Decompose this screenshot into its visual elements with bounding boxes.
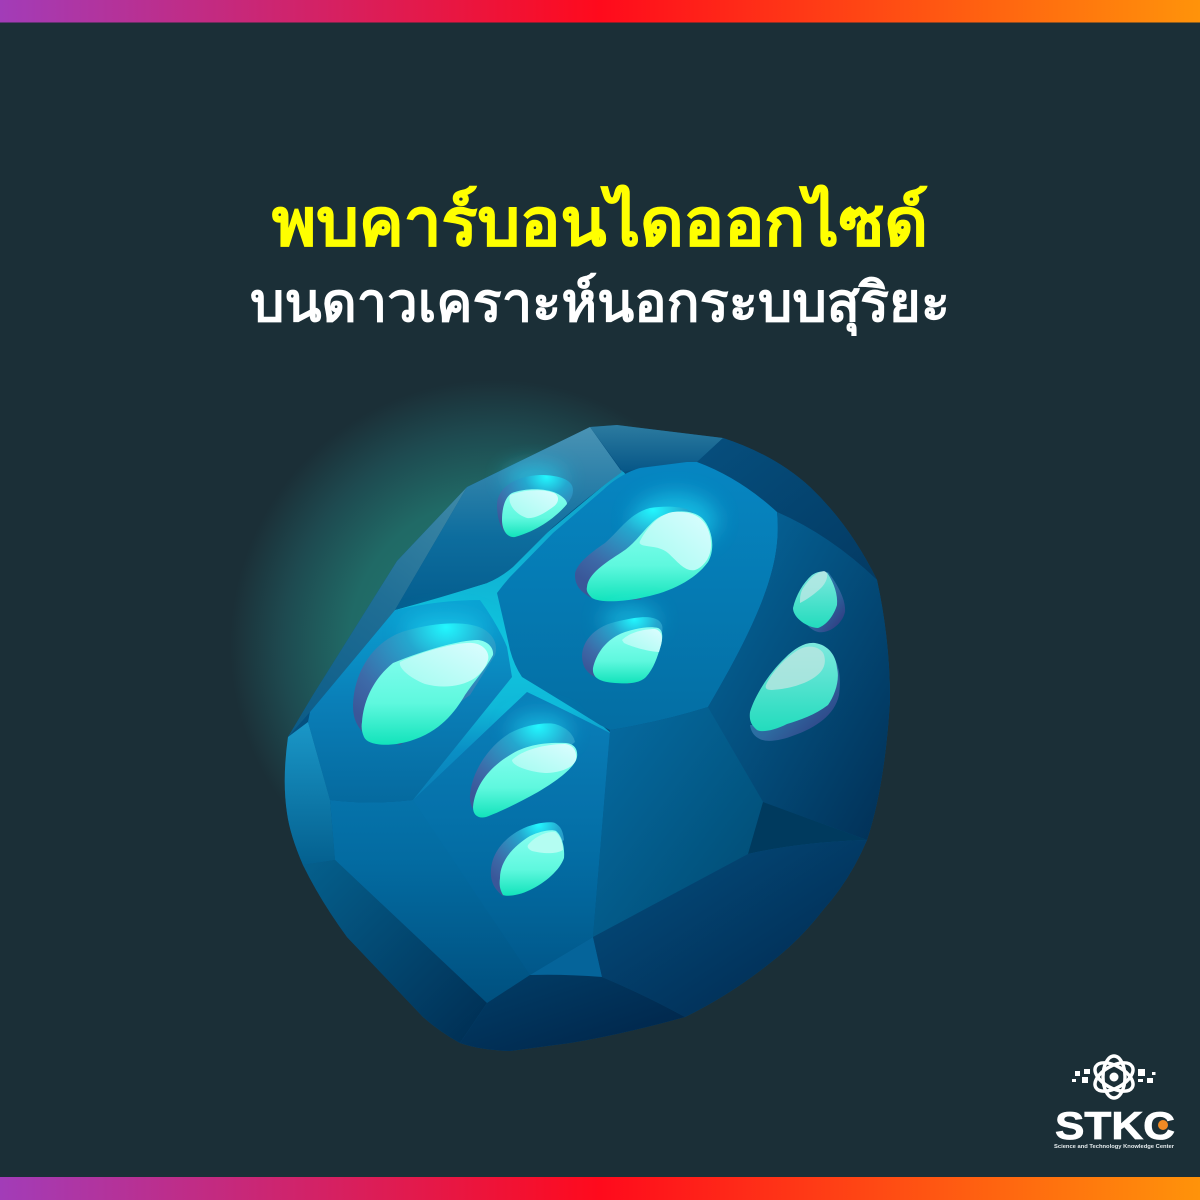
rock illustration [285, 425, 890, 1051]
crater glow [505, 465, 565, 491]
facet: right [708, 512, 890, 840]
rock base silhouette [285, 425, 890, 1051]
highlight [766, 647, 825, 690]
crater glow [510, 715, 570, 745]
crater: left large [353, 615, 496, 745]
crater cup [582, 617, 662, 684]
crater cup [491, 822, 564, 896]
highlight [640, 512, 711, 570]
crystal [500, 830, 564, 896]
bottom gradient bar [0, 1177, 1200, 1200]
crater: top-left [497, 465, 573, 537]
crystal [473, 743, 577, 818]
top gradient bar [0, 0, 1200, 22]
crater: right large [750, 643, 840, 741]
glow behind rock [230, 380, 760, 910]
title: yellow heading: พบคาร์บอนไดออกไซด์ [272, 184, 928, 259]
facet: left bright [308, 600, 512, 802]
subtitle: white heading: บนดาวเคราะห์นอกระบบสุริยะ [250, 272, 950, 337]
logo pixels left [1072, 1069, 1090, 1083]
facet: bottom-right [593, 840, 867, 1017]
logo orange dot [1158, 1120, 1168, 1130]
crater glow [602, 606, 658, 634]
crystal [587, 511, 712, 601]
facet: upper-left edge strip [288, 487, 467, 737]
facet: dark triangle [748, 802, 867, 854]
logo wordmark: STKC [1055, 1105, 1175, 1148]
crystal [793, 571, 837, 628]
highlight [512, 744, 576, 773]
highlight [509, 490, 558, 518]
crystal [593, 627, 662, 683]
crack lines [395, 470, 632, 802]
facet: lower center [593, 707, 763, 937]
crater cup [353, 623, 496, 745]
crater: right upper [793, 571, 845, 632]
crater glow [403, 615, 487, 645]
highlight [800, 571, 827, 603]
facet: lower middle right shade [413, 692, 610, 975]
crater cup [750, 655, 840, 741]
crystal [362, 640, 493, 745]
facet: lower small [530, 937, 602, 977]
crater: lower small [491, 822, 564, 896]
facet: bottom-left strip [303, 860, 487, 1043]
crater cup [575, 507, 695, 600]
crater cup [497, 475, 573, 537]
logo icon: atom [1090, 1056, 1138, 1098]
highlight [400, 643, 488, 686]
crater cup [470, 723, 575, 817]
highlight [528, 832, 563, 853]
facet: top-right strip [697, 438, 877, 580]
facet: top [590, 425, 723, 472]
crater: central small [582, 606, 662, 684]
facet: lower middle [330, 692, 610, 1003]
crystal [750, 643, 838, 731]
facet: central [497, 462, 778, 730]
highlight [622, 629, 662, 652]
crater glow [633, 494, 717, 546]
facet: bottom [460, 975, 685, 1051]
logo: STKC [1054, 1056, 1175, 1150]
facet: top-left [395, 427, 622, 610]
crater: central large [575, 494, 717, 601]
crystal [502, 489, 567, 537]
logo pixels right [1138, 1069, 1156, 1083]
crater: lower upper [470, 715, 577, 818]
facet: left slim [285, 722, 335, 865]
logo tagline: Science and Technology Knowledge Center [1054, 1144, 1175, 1150]
crater cup [800, 572, 845, 632]
